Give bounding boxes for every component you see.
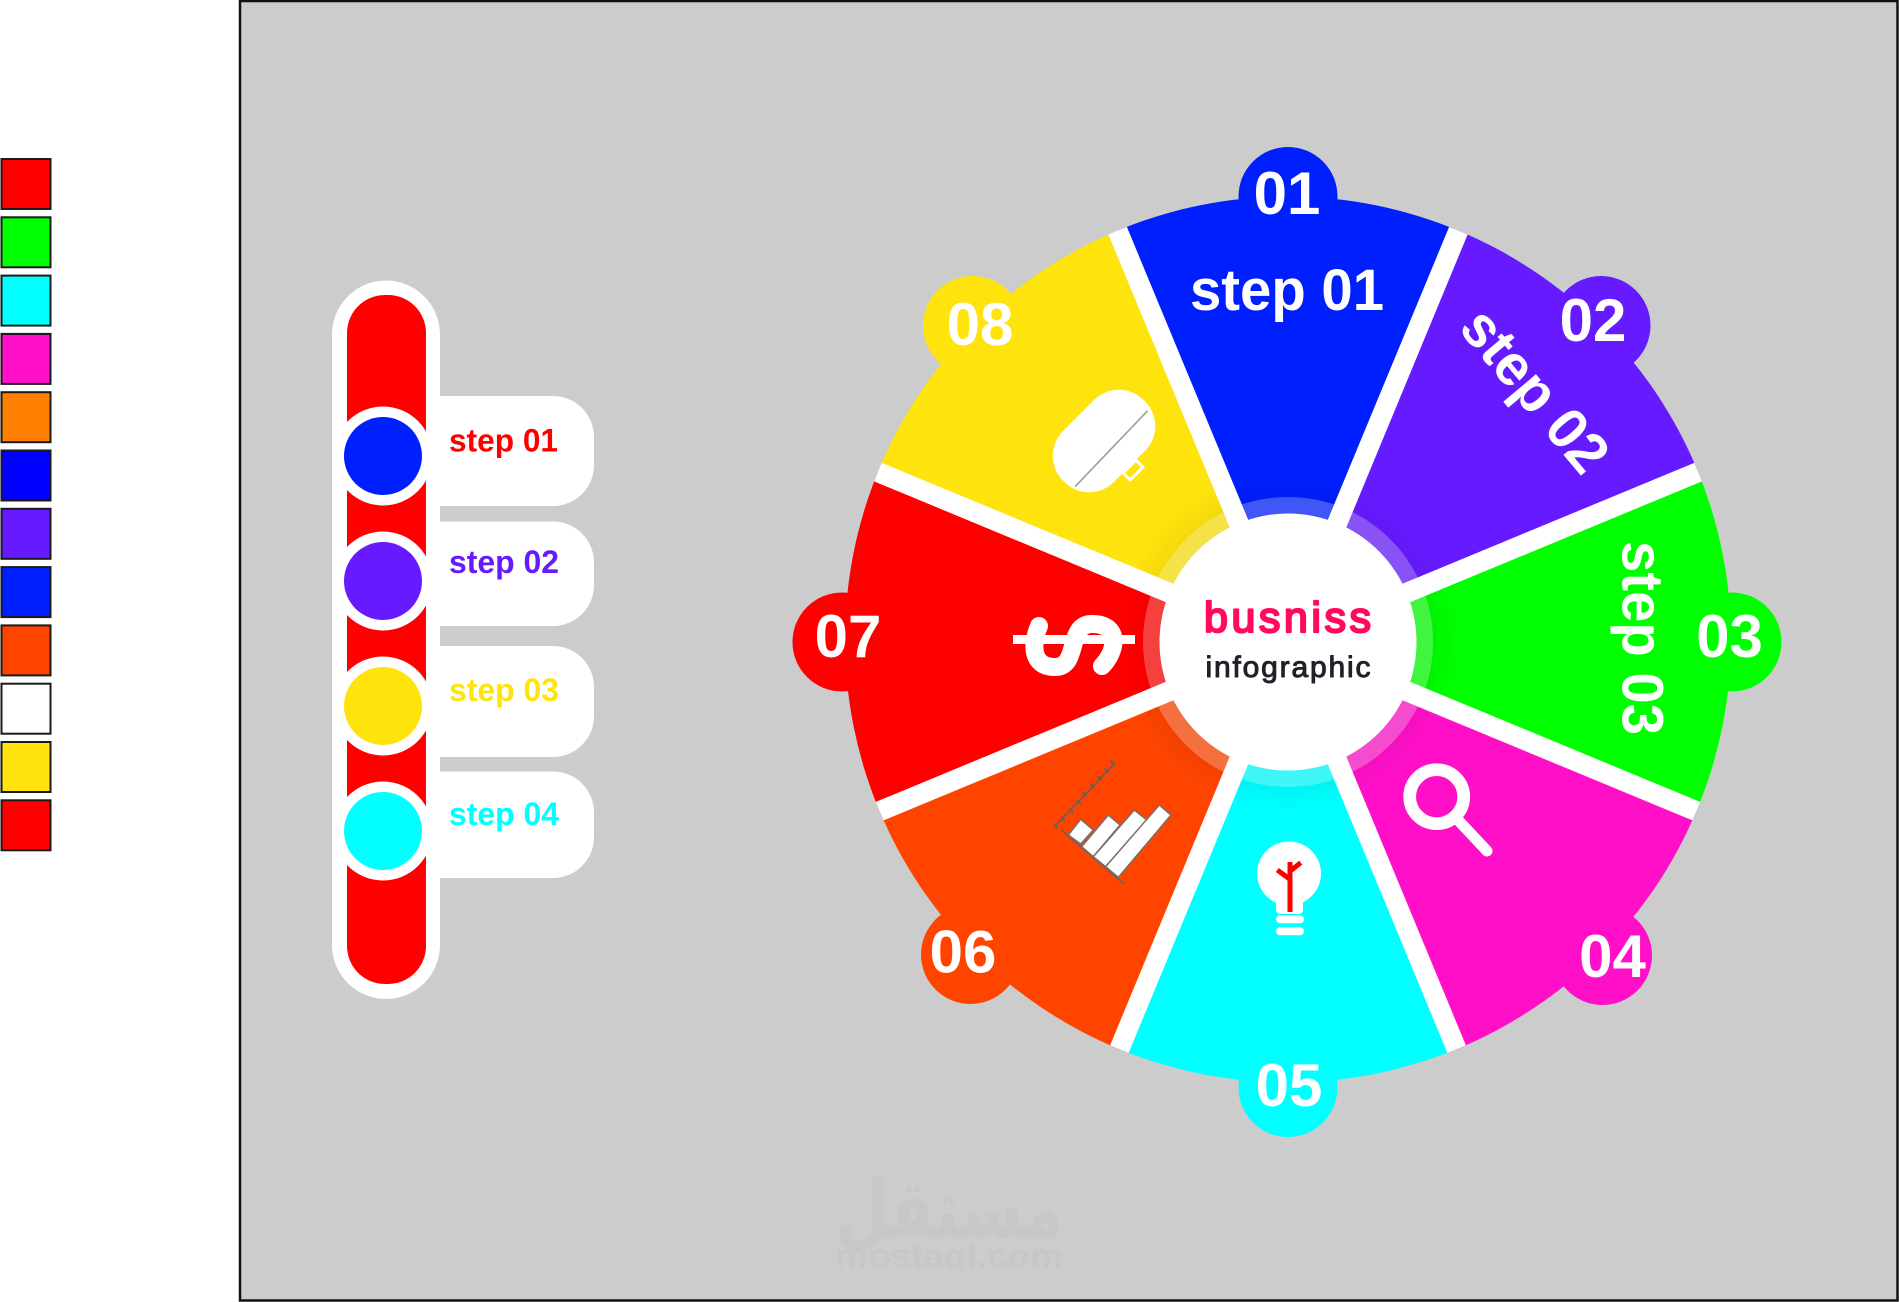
sector 08 [878, 230, 1230, 584]
step 04 label: step 04 [449, 796, 559, 832]
coloured sectors [848, 199, 1728, 1080]
icon: light bulb [1257, 842, 1321, 935]
number 03: 03 [1696, 603, 1763, 670]
wheel [792, 147, 1782, 1137]
left step list [332, 280, 594, 999]
step 04 marker [334, 782, 432, 880]
icon: bar chart [1055, 761, 1171, 883]
step tab backgrounds [430, 396, 594, 878]
watermark: mostaql.com [835, 1237, 1063, 1274]
colour swatches [2, 159, 50, 850]
vertical red pill [332, 280, 440, 999]
number 08: 08 [947, 291, 1013, 358]
translucent inner ring [1143, 497, 1433, 787]
number tabs [792, 147, 1782, 1137]
step 02 marker [334, 532, 432, 630]
sector 02 [1346, 230, 1698, 584]
subtitle: infographic: infographic [1206, 651, 1370, 684]
number 06: 06 [930, 918, 996, 986]
centre disc [1160, 514, 1416, 770]
title: busniss: busniss [1204, 594, 1371, 642]
icon: magnifier [1410, 770, 1487, 851]
step 02 sector label: step 02 [1448, 295, 1622, 486]
sector 06 [880, 700, 1230, 1050]
step 02 label: step 02 [449, 544, 559, 580]
sector 03 [1410, 472, 1728, 811]
step 01 label: step 01 [449, 422, 558, 458]
number 02: 02 [1560, 287, 1626, 354]
sector 01 [1118, 199, 1458, 520]
watermark: مستقل [835, 1163, 1063, 1256]
number 04: 04 [1579, 923, 1646, 990]
step 03 marker [334, 656, 432, 756]
sector 04 [1346, 700, 1696, 1050]
watermark [835, 1163, 1063, 1274]
number 07: 07 [815, 603, 881, 670]
icon: dollar sign [1013, 624, 1135, 667]
step 01 marker [334, 406, 432, 506]
icon: mouse [1038, 375, 1170, 507]
step 01 sector label: step 01 [1190, 258, 1384, 323]
step 03 label: step 03 [449, 672, 559, 708]
number 05: 05 [1256, 1052, 1322, 1119]
sector 07 [848, 472, 1166, 812]
step 03 sector label: step 03 [1610, 541, 1675, 735]
sector 05 [1120, 764, 1457, 1080]
number 01: 01 [1254, 160, 1320, 227]
